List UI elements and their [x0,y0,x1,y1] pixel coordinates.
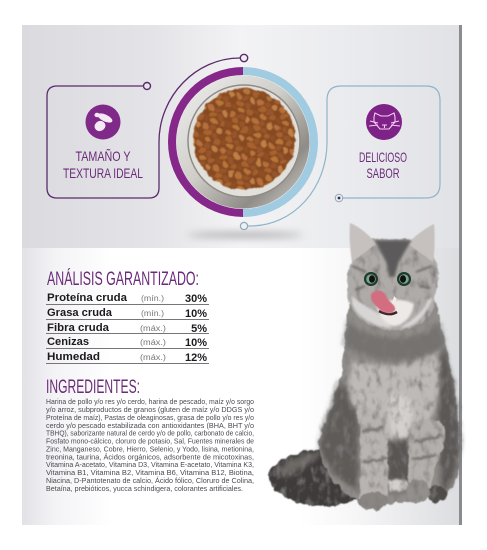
row: fibra cruda [46,322,209,335]
label: tamaño y textura ideal: TEXTURA IDEAL [63,165,143,181]
neck ruff dark [344,320,445,360]
row: cenizas: 10% [185,337,207,349]
ingredients text block: Niacina, D-Pantotenato de calcio, Ácido fólico, Cloruro de Colina, [46,476,254,485]
forehead dark markings [352,241,432,290]
connector node [144,82,150,90]
tail [269,448,368,506]
tail highlight [280,452,322,478]
kibble [193,88,295,190]
arc: blue connector [248,86,440,226]
panel: tamaño y textura ideal [47,54,248,198]
node box [335,194,343,202]
label: delicioso sabor: SABOR [366,165,400,181]
row: grasa cruda: (mín.) [141,309,164,318]
row: humedad: Humedad [47,351,100,363]
nose highlight [392,296,397,304]
bowl shadow [187,232,303,238]
leg stripes [362,428,442,462]
ring: blue half [243,67,318,217]
left ear [350,223,376,262]
row: grasa cruda: 10% [185,308,207,320]
icon: kibble [86,104,120,140]
row: cenizas: Cenizas [47,336,89,348]
right front leg [408,419,446,488]
row: humedad: 12% [185,352,207,364]
row: grasa cruda: Grasa cruda [47,307,113,319]
label: delicioso sabor [359,149,407,181]
right ear [408,224,435,262]
chest fur [349,352,439,462]
row: proteína cruda [46,292,209,305]
callout box outline [47,58,240,198]
row: grasa cruda [46,307,209,320]
row: cenizas: (máx.) [140,338,166,347]
head [348,238,438,330]
back paw [427,486,447,502]
panel: delicioso sabor [240,104,407,230]
cat fur mass [269,238,460,510]
row: humedad [46,351,209,364]
right eye [397,272,411,286]
left front leg [357,407,388,498]
ingredients text block: Proteína de maíz), Pastas de oleaginosas, grasa de pollo y/o res y/o [46,415,254,422]
ingredients text block: Zinc, Manganeso, Cobre, Hierro, Selenio, y Yodo, lisina, metionina, [46,446,254,454]
front paw right [406,479,430,503]
label: tamaño y textura ideal [63,148,143,181]
ingredients text block: Vitamina B1, Vitamina B2, Vitamina B6, Vitamina B12, Biotina, [46,470,254,477]
center chest lock [390,394,412,450]
ingredients text block: treonina, taurina, Ácidos orgánicos, adsorbente de micotoxinas, [46,452,254,462]
node bottom [240,222,248,230]
row: fibra cruda: 5% [191,323,207,335]
belly white [388,480,408,491]
ingredients text block [46,399,254,493]
icon: cat face [366,104,402,140]
row: cenizas [46,336,209,349]
heading: análisis garantizado: ANÁLISIS GARANTIZADO: [47,269,199,290]
nutrition table [46,292,209,364]
left flank shadow [319,380,358,490]
right flank shadow [436,345,460,492]
ingredients text block: cerdo y/o pescado estabilizada con antioxidantes (BHA, BHT y/o [46,423,254,430]
muzzle [376,300,414,326]
left eye [364,272,378,286]
panel: food bowl [168,67,318,217]
illustration: tabby cat licking its nose [269,223,460,510]
body [318,300,460,505]
row: fibra cruda: (máx.) [140,324,166,333]
tongue [371,291,395,313]
front paw left [358,492,388,510]
label: tamaño y textura ideal: TAMAÑO Y [76,148,131,164]
ingredients text block: Betaína, prebióticos, yucca schindigera, colorantes artificiales. [46,486,243,493]
ingredients text block: TBHQ), saborizante natural de cerdo y/o de pollo, carbonato de calcio, [46,430,254,438]
steel bowl [176,76,310,208]
row: proteína cruda: Proteína cruda [47,292,128,304]
ingredients text block: y/o arroz, subproductos de granos (gluten de maíz y/o DDGS y/o [46,407,254,414]
ring: purple half [168,67,243,217]
row: humedad: (máx.) [140,353,166,362]
ingredients text block: Vitamina A-acetato, Vitamina D3, Vitamina E-acetato, Vitamina K3, [46,462,254,469]
heading: ingredientes: INGREDIENTES: [46,377,140,398]
arc node [240,54,248,62]
belly [385,440,412,492]
ingredients text block: Fosfato mono-cálcico, cloruro de potasio, Sal, Fuentes minerales de [46,438,254,446]
cheek light [352,296,433,328]
row: proteína cruda: 30% [185,293,207,305]
label: delicioso sabor: DELICIOSO [359,149,407,165]
row: proteína cruda: (mín.) [141,294,164,303]
row: fibra cruda: Fibra cruda [47,322,110,334]
ingredients text block: Harina de pollo y/o res y/o cerdo, harina de pescado, maíz y/o sorgo [46,399,254,406]
mouth [379,311,397,314]
